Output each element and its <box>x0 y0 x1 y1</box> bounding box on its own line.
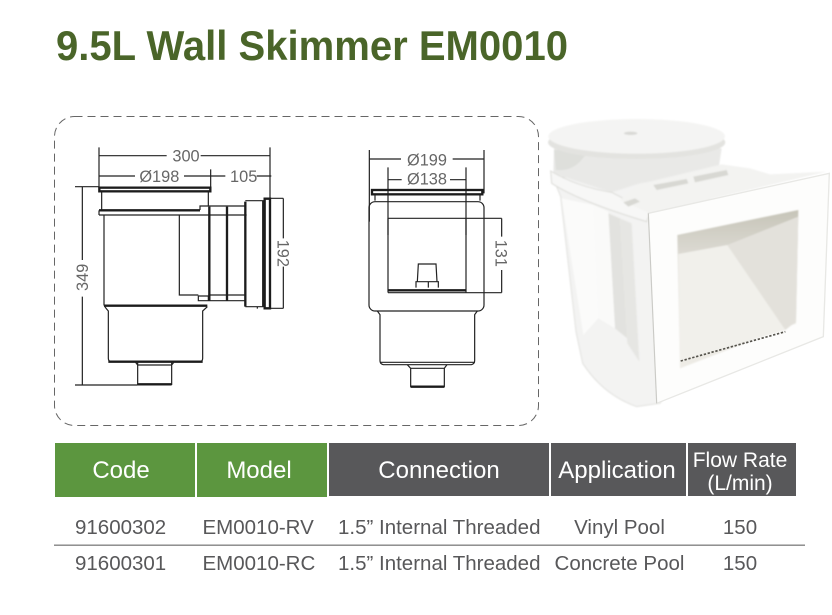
table row: 91600301: 1.5” Internal Threaded <box>338 552 540 575</box>
dimension: 105: 105 <box>230 168 257 186</box>
dimension: 349: 349 <box>74 264 92 291</box>
front view drawing <box>369 150 509 387</box>
dimension: 300: 300 <box>172 148 200 166</box>
table row: 91600302: EM0010-RV <box>202 516 314 539</box>
header cell: Code: Code <box>92 457 150 484</box>
dimension: 192: 192 <box>274 240 292 267</box>
dimension: diameter 199: Ø199 <box>407 152 447 170</box>
table header row <box>55 443 796 497</box>
header cell: Flow Rate: Flow Rate <box>693 449 787 472</box>
panel: technical drawings <box>54 116 538 426</box>
dimension: diameter 138: Ø138 <box>407 171 447 189</box>
dimension: diameter 198: Ø198 <box>139 168 179 186</box>
title: 9.5L Wall Skimmer EM0010 <box>56 22 568 69</box>
table row: 91600301: Concrete Pool <box>555 552 684 575</box>
side view drawing <box>74 147 292 385</box>
table row: 91600302: 150 <box>723 516 757 539</box>
header cell: Code <box>55 443 195 497</box>
header cell: Model: Model <box>226 457 292 484</box>
header cell: Application: Application <box>558 457 676 484</box>
header cell: Application <box>551 443 686 496</box>
table row: 91600302: 1.5” Internal Threaded <box>338 516 540 539</box>
header cell: Flow Rate <box>688 443 796 496</box>
table row: 91600302 <box>75 516 757 539</box>
dimension: 131: 131 <box>491 240 509 267</box>
table row: 91600301: EM0010-RC <box>202 552 315 575</box>
product photo: wall skimmer <box>548 119 829 407</box>
table row: 91600301: 91600301 <box>75 552 166 575</box>
table <box>54 443 805 575</box>
header cell: Flow Rate: (L/min) <box>707 472 773 495</box>
header cell: Connection: Connection <box>378 457 500 484</box>
table row: 91600301 <box>75 552 757 575</box>
header cell: Connection <box>329 443 549 496</box>
table row: 91600301: 150 <box>723 552 757 575</box>
header cell: Model <box>197 443 327 497</box>
table row: 91600302: 91600302 <box>75 516 166 539</box>
table row: 91600302: Vinyl Pool <box>574 516 665 539</box>
